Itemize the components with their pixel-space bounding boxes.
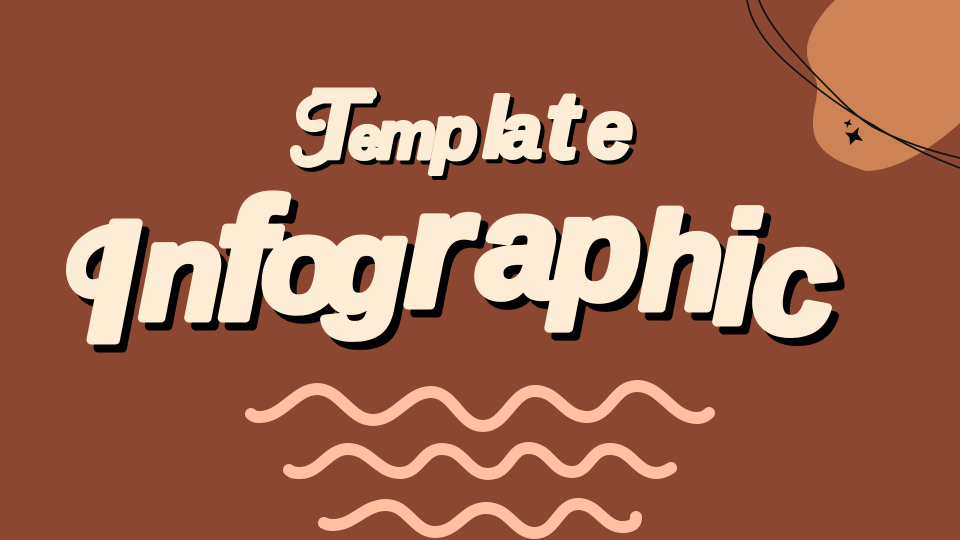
heading: Infographic <box>76 156 835 377</box>
heading: Template: t <box>546 73 581 179</box>
heading: Infographic: c <box>752 196 835 364</box>
heading: Infographic: g <box>324 191 406 338</box>
heading: Infographic: n <box>140 196 222 347</box>
heading: Infographic: f <box>216 165 287 355</box>
heading: Infographic: p <box>548 167 641 329</box>
wavy lines <box>251 386 709 533</box>
heading: Infographic: i <box>714 182 760 355</box>
heading: Infographic: o <box>262 191 343 338</box>
heading: Template: l <box>483 81 508 175</box>
heading: Template: p <box>430 91 477 174</box>
orbit lines <box>747 0 960 168</box>
heading: Infographic: r <box>405 156 477 340</box>
heading: Template: T <box>306 69 373 179</box>
icon: sparkle stars <box>844 119 863 145</box>
heading: Template: m <box>377 98 436 172</box>
heading: Infographic: a <box>478 165 559 327</box>
heading: Template <box>296 69 633 179</box>
decorative corner blob <box>807 0 960 171</box>
heading: Template: e <box>587 84 633 175</box>
heading: Infographic: h <box>640 186 722 337</box>
heading: Template: e <box>349 106 381 171</box>
heading: Template: a <box>500 89 542 173</box>
heading: Infographic: I <box>88 187 139 377</box>
